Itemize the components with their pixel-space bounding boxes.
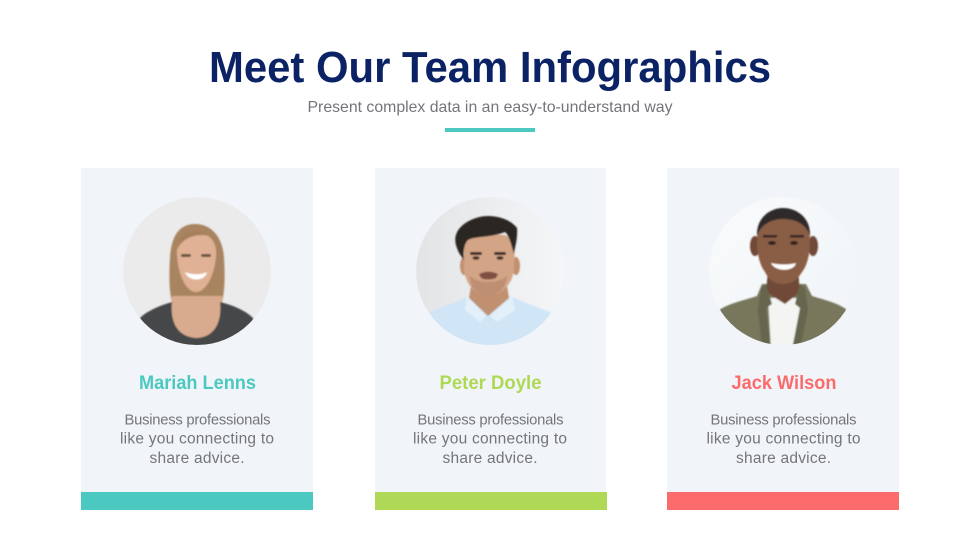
card background: [375, 168, 606, 492]
subtitle: Present complex data in an easy-to-understand way: [308, 99, 672, 116]
name: Mariah Lenns: [139, 373, 256, 394]
description: share advice.: [736, 450, 831, 467]
icon: portrait of Jack Wilson: [720, 207, 846, 344]
panel: Peter Doyle: [375, 168, 607, 510]
title: Meet Our Team Infographics: [209, 43, 771, 92]
description: [706, 412, 860, 467]
name: Jack Wilson: [732, 373, 836, 394]
description: Business professionals: [124, 412, 270, 428]
description: share advice.: [442, 450, 538, 467]
icon: portrait of Peter Doyle: [416, 197, 551, 345]
panel: Mariah Lenns: [81, 168, 313, 510]
description: like you connecting to: [120, 430, 274, 448]
title accent line: [445, 128, 535, 132]
card background: [81, 168, 313, 492]
description: Business professionals: [418, 412, 564, 428]
accent bar: [81, 492, 313, 510]
description: [413, 412, 567, 467]
accent bar: [667, 492, 899, 510]
description: Business professionals: [710, 412, 856, 428]
card background: [667, 168, 899, 492]
name: Peter Doyle: [440, 373, 542, 394]
accent bar: [375, 492, 607, 510]
icon: portrait of Mariah Lenns: [123, 197, 271, 350]
description: share advice.: [150, 450, 244, 467]
description: like you connecting to: [706, 430, 860, 448]
description: like you connecting to: [413, 430, 567, 448]
panel: Jack Wilson: [667, 168, 899, 510]
description: [120, 412, 274, 467]
